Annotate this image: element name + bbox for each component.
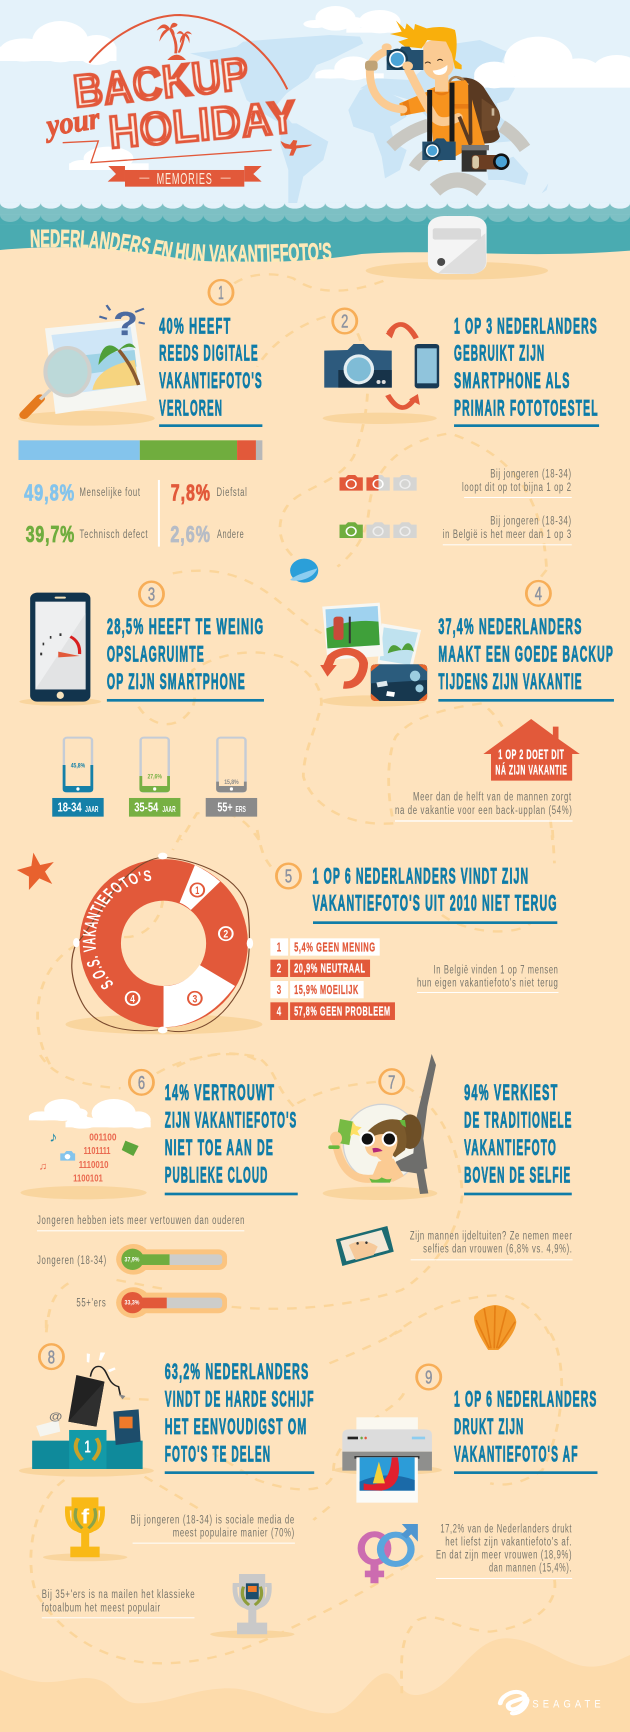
Seagate logo (500, 1692, 605, 1713)
stats legend: Menselijke fout (80, 485, 141, 499)
age label 35-54 (129, 798, 180, 817)
binary digits: 001100 (89, 1133, 117, 1143)
number 3: 3 (148, 584, 155, 605)
stats legend: 2,6% (170, 522, 211, 547)
icon: camera and smartphone swap (323, 324, 439, 424)
icon: hard drive on podium: @ (49, 1410, 62, 1423)
text: klassieke fotoalbum: Bij 35+'ers is na mailen het klassieke (42, 1587, 195, 1601)
number 3 (139, 582, 164, 606)
text: sociale media: meest populaire manier (70%) (173, 1526, 295, 1539)
straps (430, 77, 471, 145)
age label 18-34 (52, 798, 104, 817)
number 2: 2 (341, 311, 348, 332)
bottom sand dunes (0, 1638, 630, 1732)
section 1 and 2: REEDS DIGITALE (159, 342, 259, 366)
icon: airplane (281, 140, 312, 156)
icon: palm island (157, 23, 192, 60)
lifebuoy numbers (126, 883, 233, 1005)
traveller with cameras (365, 21, 525, 190)
text: sociale media: Bij jongeren (18-34) is sociale media de (131, 1513, 295, 1526)
icon: lost photo under magnifier (18, 305, 155, 426)
heading 9 (454, 1388, 597, 1474)
number 5: 5 (285, 866, 292, 887)
device shadow (366, 262, 548, 280)
number 8 (39, 1344, 63, 1369)
telephoto camera (462, 145, 510, 172)
binary digits: 1100101 (73, 1174, 103, 1184)
icon: hard drive on podium: 1 (84, 1437, 91, 1457)
icon: phone with storage gauge (19, 593, 101, 706)
text: klassieke fotoalbum: fotoalbum het meest populair (42, 1600, 161, 1614)
icon: printer (333, 1417, 442, 1503)
section 5 (17, 852, 559, 1034)
world map (190, 35, 548, 205)
lifebuoy: S.O.S. VAKANTIEFOTO'S (82, 870, 152, 990)
icon: beach ball (290, 559, 318, 583)
title: your: your (40, 101, 103, 143)
section 8 and 9 (19, 1344, 605, 1713)
stats legend: Andere (217, 527, 244, 541)
text: Belgie 1 op 3 (443, 514, 572, 545)
phone gauge 18-34 (63, 738, 93, 792)
lifebuoy text (95, 881, 174, 984)
lifebuoy legend: 1 (277, 940, 282, 955)
thermometer 55+ (76, 1287, 227, 1318)
lifebuoy legend (270, 938, 395, 1020)
Seagate logo: SEAGATE (532, 1697, 605, 1710)
heading 7 (464, 1081, 573, 1195)
shirt (399, 80, 487, 162)
sea waves (0, 203, 630, 262)
heading 1: 40% HEEFT (159, 314, 231, 339)
number 2 (333, 309, 357, 333)
camera pictogram row 1 (340, 475, 417, 491)
number 4 (526, 581, 550, 606)
age label 55+ (206, 798, 257, 817)
heading 3: OPSLAGRUIMTE (107, 643, 205, 667)
stats legend: Technisch defect (80, 527, 148, 541)
header scenery and sea (0, 203, 630, 262)
mirror (343, 1104, 420, 1182)
question mark: ? (113, 305, 138, 342)
logo: backup your holiday (40, 15, 312, 188)
phone gauge 18-34: 45,8% (71, 761, 85, 769)
beach edge (0, 247, 630, 293)
section 8 and 9: VINDT DE HARDE SCHIJF (165, 1388, 315, 1412)
text: jongeren 1 op 2 (462, 466, 572, 498)
Eiffel tower (395, 1054, 436, 1194)
section 1 and 2 (18, 280, 599, 583)
binary digits (73, 1133, 117, 1184)
heading 3 (107, 615, 264, 702)
phone gauge 35-54 (139, 738, 170, 792)
lifebuoy legend: 5,4% GEEN MENING (294, 940, 376, 955)
camera pictogram row 2 (340, 522, 417, 538)
text: Belgie 1 op 7 (417, 962, 559, 993)
icon: gold trophy with facebook: f (81, 1505, 90, 1528)
number 6 (129, 1070, 153, 1095)
number 9 (417, 1365, 441, 1389)
thermometer jongeren: Jongeren (18-34) (37, 1253, 107, 1267)
heading 5 (313, 864, 558, 924)
stats legend: 7,8% (171, 481, 211, 506)
phone gauge 55+: 15,8% (224, 778, 239, 786)
icon: gender symbols (361, 1524, 418, 1583)
icon: shell (474, 1305, 516, 1350)
woman (328, 1114, 422, 1183)
heading 8: FOTO'S TE DELEN (165, 1442, 271, 1467)
icon: selfie on smartphone (336, 1226, 394, 1266)
thermometer jongeren (37, 1244, 227, 1275)
header sky (0, 0, 630, 250)
lifebuoy numbers: 4 (130, 992, 135, 1005)
title: BACKUP: BACKUP (71, 47, 251, 117)
icon: cloud with binary data (20, 1099, 151, 1199)
section 6 and 7 (20, 1069, 573, 1350)
thermometer 55+: 55+'ers (76, 1296, 106, 1309)
heading 8 (165, 1360, 315, 1474)
age label 18-34: JAAR (85, 805, 98, 815)
heading 1 (159, 314, 263, 427)
heading: Nederlanders en hun vakantiefoto's: NEDERLANDERS EN HUN VAKANTIEFOTO'S (30, 229, 332, 262)
section 6 and 7: NIET TOE AAN DE (165, 1136, 274, 1160)
thermometer 55+: 33,3% (125, 1298, 140, 1306)
icon: starfish (17, 853, 54, 890)
heading 4 (438, 615, 614, 702)
binary digits: 1101111 (84, 1146, 110, 1157)
age label 18-34: 18-34 (57, 800, 82, 815)
title: HOLIDAY: HOLIDAY (106, 90, 298, 159)
text: mannen backup-plan (395, 790, 573, 822)
number 7 (380, 1069, 404, 1094)
section 8 and 9: 63,2% NEDERLANDERS (165, 1360, 309, 1384)
text: jongeren vertrouwen: Jongeren hebben iets meer vertouwen dan ouderen (37, 1213, 245, 1227)
number 1: 1 (218, 283, 224, 304)
lifebuoy legend: 3 (277, 983, 282, 998)
lifebuoy legend: 15,9% MOEILIJK (294, 983, 359, 998)
floating media icons: ♪ (49, 1130, 57, 1145)
stats legend: 39,7% (26, 522, 75, 547)
wifi arcs (391, 125, 525, 190)
number 4: 4 (535, 584, 542, 605)
number 5 (276, 864, 301, 888)
number 6: 6 (138, 1073, 145, 1094)
stats legend: 49,8% (24, 481, 75, 506)
section 5: 57,8% GEEN PROBLEEM (294, 1005, 391, 1019)
lifebuoy legend: 2 (277, 962, 282, 976)
hanging camera (422, 138, 456, 160)
number 8: 8 (48, 1347, 55, 1368)
stacked bar (18, 440, 262, 460)
icon: hard drive on podium (19, 1352, 154, 1477)
text: mannen selfies (410, 1228, 573, 1260)
text: klassieke fotoalbum (42, 1587, 195, 1618)
floating media icons (39, 1130, 139, 1172)
head (390, 21, 462, 92)
camera in hands (365, 43, 423, 71)
icon: silver trophy with album (210, 1574, 295, 1638)
section 6 and 7: PUBLIEKE CLOUD (165, 1163, 268, 1188)
section 8 and 9: HET EENVOUDIGST OM (165, 1415, 307, 1439)
binary digits: 1110010 (79, 1160, 108, 1171)
stats legend: Diefstal (217, 485, 248, 499)
title underline (63, 141, 272, 163)
stats legend (24, 480, 248, 547)
icon: gold trophy with facebook (43, 1497, 127, 1561)
heading 1: VERLOREN (159, 396, 223, 421)
icon: house callout (483, 719, 580, 781)
section 3 and 4 (19, 581, 614, 822)
floating media icons: ♫ (39, 1161, 48, 1172)
age label 55+: 55+ (217, 800, 233, 815)
arms (370, 52, 458, 122)
title arc (89, 15, 287, 89)
lifebuoy numbers: 2 (223, 928, 228, 940)
icon: wireless drive (428, 216, 487, 274)
thermometer jongeren: 37,9% (125, 1255, 140, 1263)
icon: photos, restore arrow and suitcase (320, 603, 427, 707)
section 6 and 7: ZIJN VAKANTIEFOTO'S (165, 1109, 297, 1133)
selfie woman with Eiffel tower (323, 1054, 437, 1200)
memories ribbon (108, 166, 262, 188)
phone gauge 55+ (216, 738, 247, 792)
clouds (0, 6, 630, 170)
number 9: 9 (425, 1367, 432, 1388)
lifebuoy numbers: 1 (195, 884, 199, 897)
number 7: 7 (388, 1072, 395, 1093)
phone gauge 35-54: 27,6% (147, 772, 162, 780)
heading 2 (454, 314, 599, 427)
dashed journey route (31, 274, 562, 1693)
age label 55+: ERS (235, 805, 246, 815)
section 3 and 4: OP ZIJN SMARTPHONE (107, 670, 246, 694)
age label 35-54: 35-54 (134, 800, 159, 815)
backpack (457, 78, 500, 145)
number 1 (209, 280, 233, 305)
section 6 and 7: 14% VERTROUWT (165, 1081, 275, 1105)
section 1 and 2: VAKANTIEFOTO'S (159, 369, 263, 393)
lifebuoy legend: 4 (277, 1005, 282, 1019)
text: printing vrouwen mannen (436, 1521, 572, 1579)
section 3 and 4: 28,5% HEEFT TE WEINIG (107, 615, 264, 639)
heading 6 (165, 1081, 298, 1195)
device on the beach (366, 216, 548, 280)
lifebuoy (66, 852, 262, 1034)
lifebuoy numbers: 3 (192, 992, 197, 1005)
ribbon label: MEMORIES (157, 171, 213, 188)
age label 35-54: JAAR (162, 805, 176, 815)
text: sociale media (131, 1513, 295, 1544)
shadow (323, 1187, 437, 1200)
lifebuoy legend: 20,9% NEUTRAAL (294, 962, 366, 976)
